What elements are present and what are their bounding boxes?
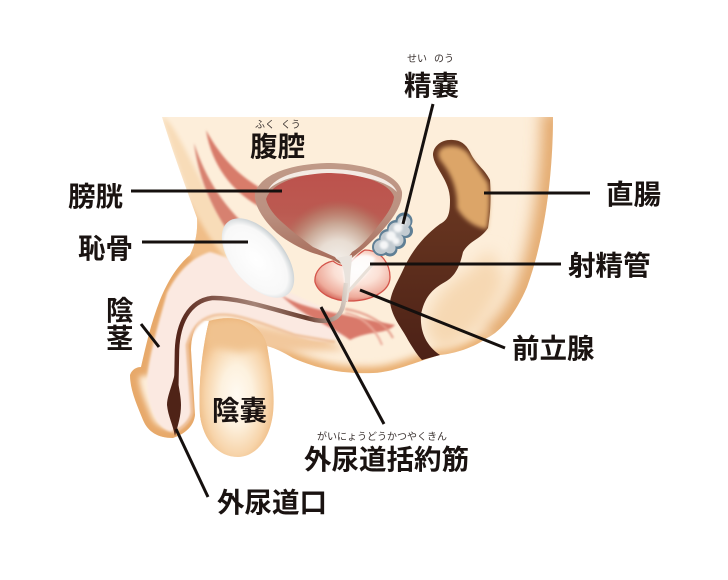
penis interior [147,252,345,432]
label: external urethral sphincter: 外尿道括約筋 [304,444,469,475]
leader lines [131,104,590,497]
urethra [167,283,346,436]
muscle strips [194,130,395,345]
label: penis [106,295,134,354]
label: rectum: 直腸 [606,179,661,210]
label: seminal vesicle [404,53,459,101]
label: bladder: 膀胱 [68,181,123,212]
rectum [390,140,491,360]
bladder [254,163,402,264]
label: pubic bone: 恥骨 [78,233,133,264]
prostate [315,250,390,302]
label: prostate: 前立腺 [512,333,594,364]
seminal vesicle [372,212,413,256]
label: penis: 茎 [106,323,134,354]
body silhouette [130,110,553,457]
bladder lumen [266,173,394,260]
label: abdominal cavity: 腹腔 [250,131,305,162]
label: penis: 陰 [106,295,134,326]
label: abdominal cavity: ふく [255,120,275,131]
pubic bone [208,205,308,311]
label: external urethral sphincter [304,430,469,475]
label: scrotum: 陰嚢 [212,395,267,426]
bladder wall [255,163,402,264]
label: external urethral orifice: 外尿道口 [217,487,327,518]
label: external urethral sphincter: がいにょうどうかつやくきん [317,430,447,443]
label: seminal vesicle: 精嚢 [404,70,459,101]
label: seminal vesicle: のう [434,53,454,65]
scrotum [200,318,275,457]
label: abdominal cavity: くう [281,119,301,131]
label: seminal vesicle: せい [407,54,427,65]
label: ejaculatory duct: 射精管 [568,250,650,281]
pelvis cross-section [130,110,553,457]
